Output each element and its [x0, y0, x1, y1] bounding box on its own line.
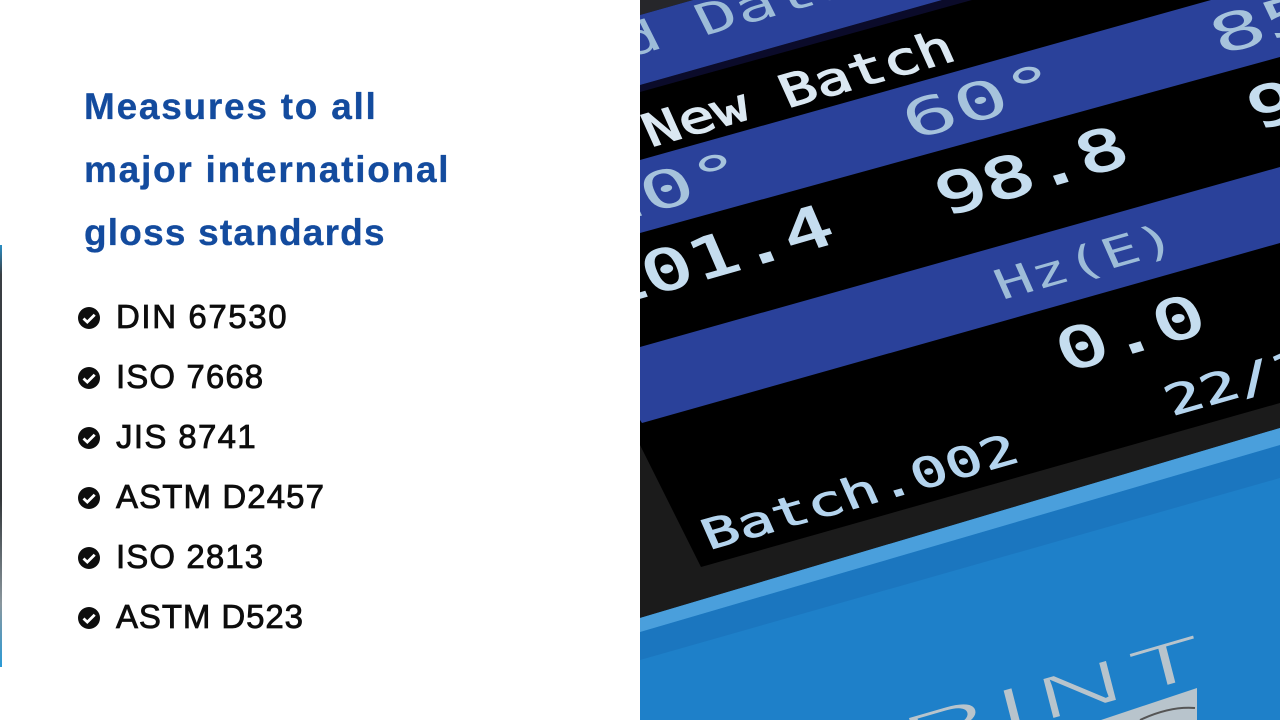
screen readouts: New Batch	[640, 21, 963, 157]
device body	[640, 428, 1280, 720]
title: gloss standards	[84, 212, 386, 253]
screen readouts: Hz(E)	[986, 214, 1183, 310]
title	[84, 86, 450, 253]
panel: device screen close-up	[640, 0, 1280, 720]
list item: JIS 8741: JIS 8741	[116, 418, 257, 455]
photo edge sliver	[0, 245, 2, 667]
screen readouts: 60°	[891, 52, 1071, 152]
screen readouts: 0.0	[1045, 282, 1216, 385]
list item: DIN 67530: DIN 67530	[116, 298, 288, 335]
list item: ASTM D2457: ASTM D2457	[116, 478, 325, 515]
screen frame	[640, 403, 1280, 620]
list item: ISO 2813: ISO 2813	[116, 538, 264, 575]
title: major international	[84, 149, 450, 190]
blue header band 1	[640, 0, 942, 85]
blue header band 3	[640, 167, 1280, 423]
blue header band 2	[640, 0, 1280, 233]
list item: ASTM D523: ASTM D523	[116, 598, 304, 635]
standards list	[78, 298, 325, 635]
screen readouts: 98.8	[925, 115, 1138, 229]
list item: ISO 7668: ISO 7668	[116, 358, 264, 395]
screen readouts	[577, 0, 1280, 560]
screen readouts: Batch.002	[694, 426, 1026, 560]
title: Measures to all	[84, 86, 378, 127]
